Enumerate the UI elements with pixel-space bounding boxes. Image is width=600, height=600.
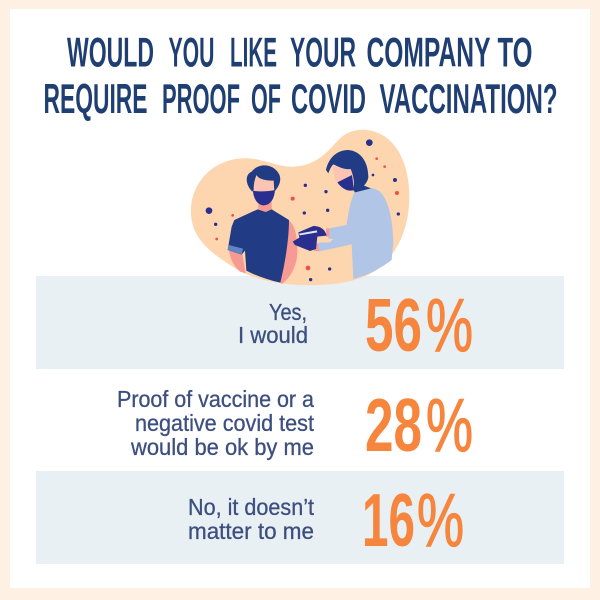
decorative particles xyxy=(206,139,400,281)
patient right arm xyxy=(278,220,297,284)
row 1: label xyxy=(238,299,308,348)
patient neck xyxy=(258,197,272,213)
row 2: percentage: 28 xyxy=(365,383,422,467)
row 3: label: No, it doesn’t xyxy=(188,494,315,520)
nurse mask xyxy=(337,175,354,191)
panel: yes row background xyxy=(36,276,564,369)
illustration: vaccination scene xyxy=(191,130,409,285)
title: OF xyxy=(251,75,281,122)
title xyxy=(44,28,558,122)
nurse face xyxy=(333,165,355,192)
title: COVID xyxy=(291,75,366,122)
nurse wrist xyxy=(313,228,329,251)
patient hair xyxy=(247,165,280,192)
row 3: percentage: 16 xyxy=(362,478,415,562)
title: PROOF xyxy=(162,75,240,122)
gloved hands xyxy=(293,226,327,251)
row 3: label xyxy=(188,494,315,544)
title: YOUR xyxy=(290,28,356,76)
title: TO xyxy=(498,28,532,76)
patient sleeve cuff xyxy=(228,245,243,254)
title: LIKE xyxy=(230,28,277,76)
row 2: label: Proof of vaccine or a xyxy=(117,386,314,412)
row 2: label: negative covid test xyxy=(135,410,315,436)
nurse finger xyxy=(316,238,333,242)
title: WOULD xyxy=(67,28,154,76)
row 1: percentage: % xyxy=(426,283,473,367)
illustration background blob xyxy=(191,130,409,285)
row 2: percentage: % xyxy=(426,383,473,467)
nurse coat xyxy=(317,188,393,279)
patient face xyxy=(254,177,274,205)
row 2: label xyxy=(117,386,315,460)
panel: no row background xyxy=(36,471,564,564)
patient left arm xyxy=(229,250,246,273)
title: COMPANY xyxy=(366,28,490,76)
patient shirt xyxy=(228,209,289,283)
row 3: label: matter to me xyxy=(188,518,314,544)
row 1: label: Yes, xyxy=(269,299,307,325)
syringe xyxy=(299,230,317,235)
row 1: percentage: 56 xyxy=(365,283,422,367)
patient xyxy=(228,165,297,284)
nurse xyxy=(293,150,393,279)
row 1: label: I would xyxy=(238,322,308,348)
title: YOU xyxy=(168,28,214,76)
patient mask xyxy=(253,190,275,205)
row 2: label: would be ok by me xyxy=(130,434,314,460)
row 3: percentage: % xyxy=(417,478,464,562)
nurse hair xyxy=(326,150,371,192)
title: REQUIRE xyxy=(44,75,148,122)
